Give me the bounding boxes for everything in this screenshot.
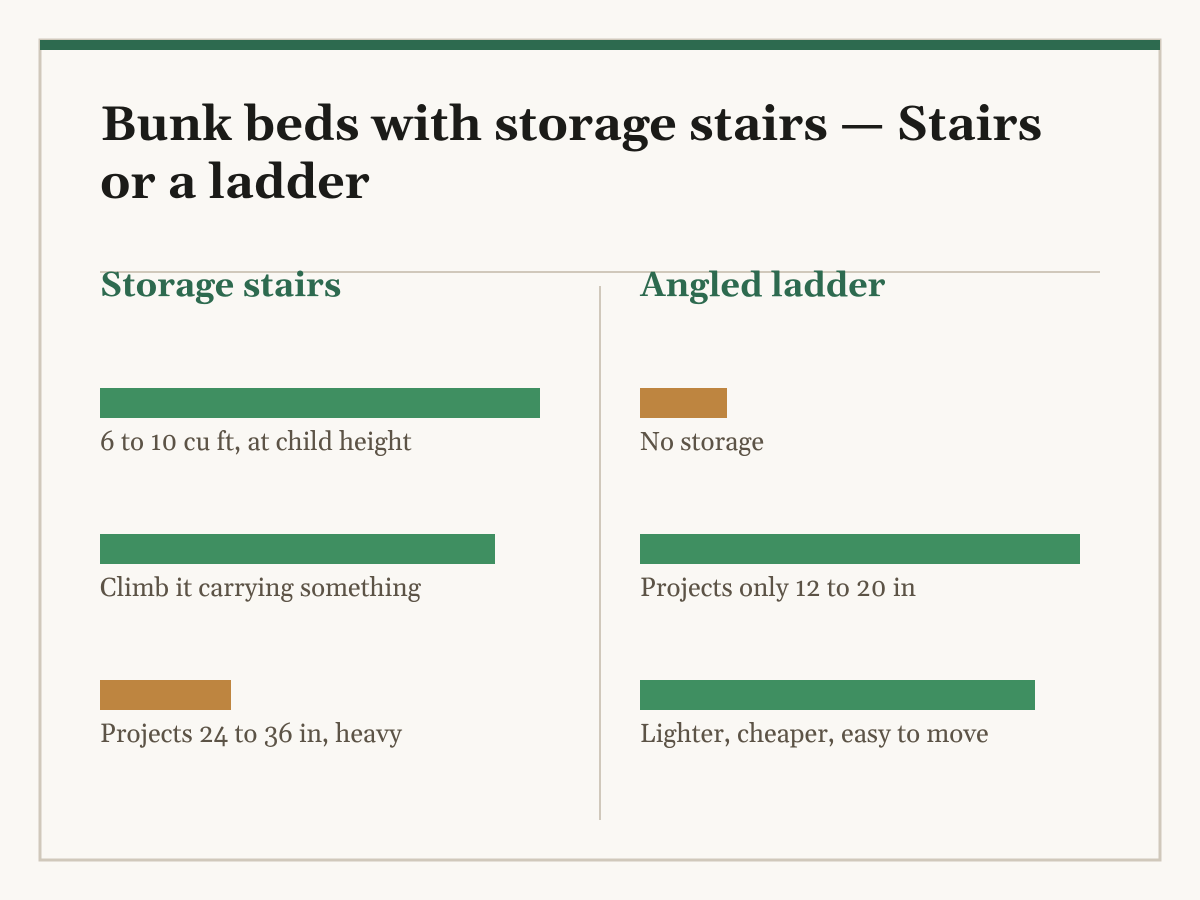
label: footprint: Projects 24 to 36 in, heavy [100, 718, 403, 751]
bar: portability [640, 680, 1035, 710]
label: carrying: Climb it carrying something [100, 572, 422, 605]
panel: storage stairs [100, 264, 540, 751]
bar: storage [640, 388, 727, 418]
bar: footprint [100, 680, 231, 710]
header rule [100, 271, 1100, 273]
column divider [599, 286, 601, 820]
label: storage: No storage [640, 426, 764, 459]
heading: angled ladder: Angled ladder [639, 264, 886, 308]
heading: storage stairs: Storage stairs [100, 264, 341, 308]
panel: angled ladder [639, 264, 1080, 751]
title: Bunk beds with storage stairs — Stairs [100, 96, 1042, 157]
label: footprint: Projects only 12 to 20 in [640, 572, 916, 605]
bar: carrying [100, 534, 495, 564]
label: portability: Lighter, cheaper, easy to move [640, 718, 989, 751]
bar: storage [100, 388, 540, 418]
bar: footprint [640, 534, 1080, 564]
title: or a ladder [100, 154, 370, 215]
label: storage: 6 to 10 cu ft, at child height [100, 426, 412, 459]
top accent bar [40, 40, 1160, 50]
title [100, 96, 1042, 215]
